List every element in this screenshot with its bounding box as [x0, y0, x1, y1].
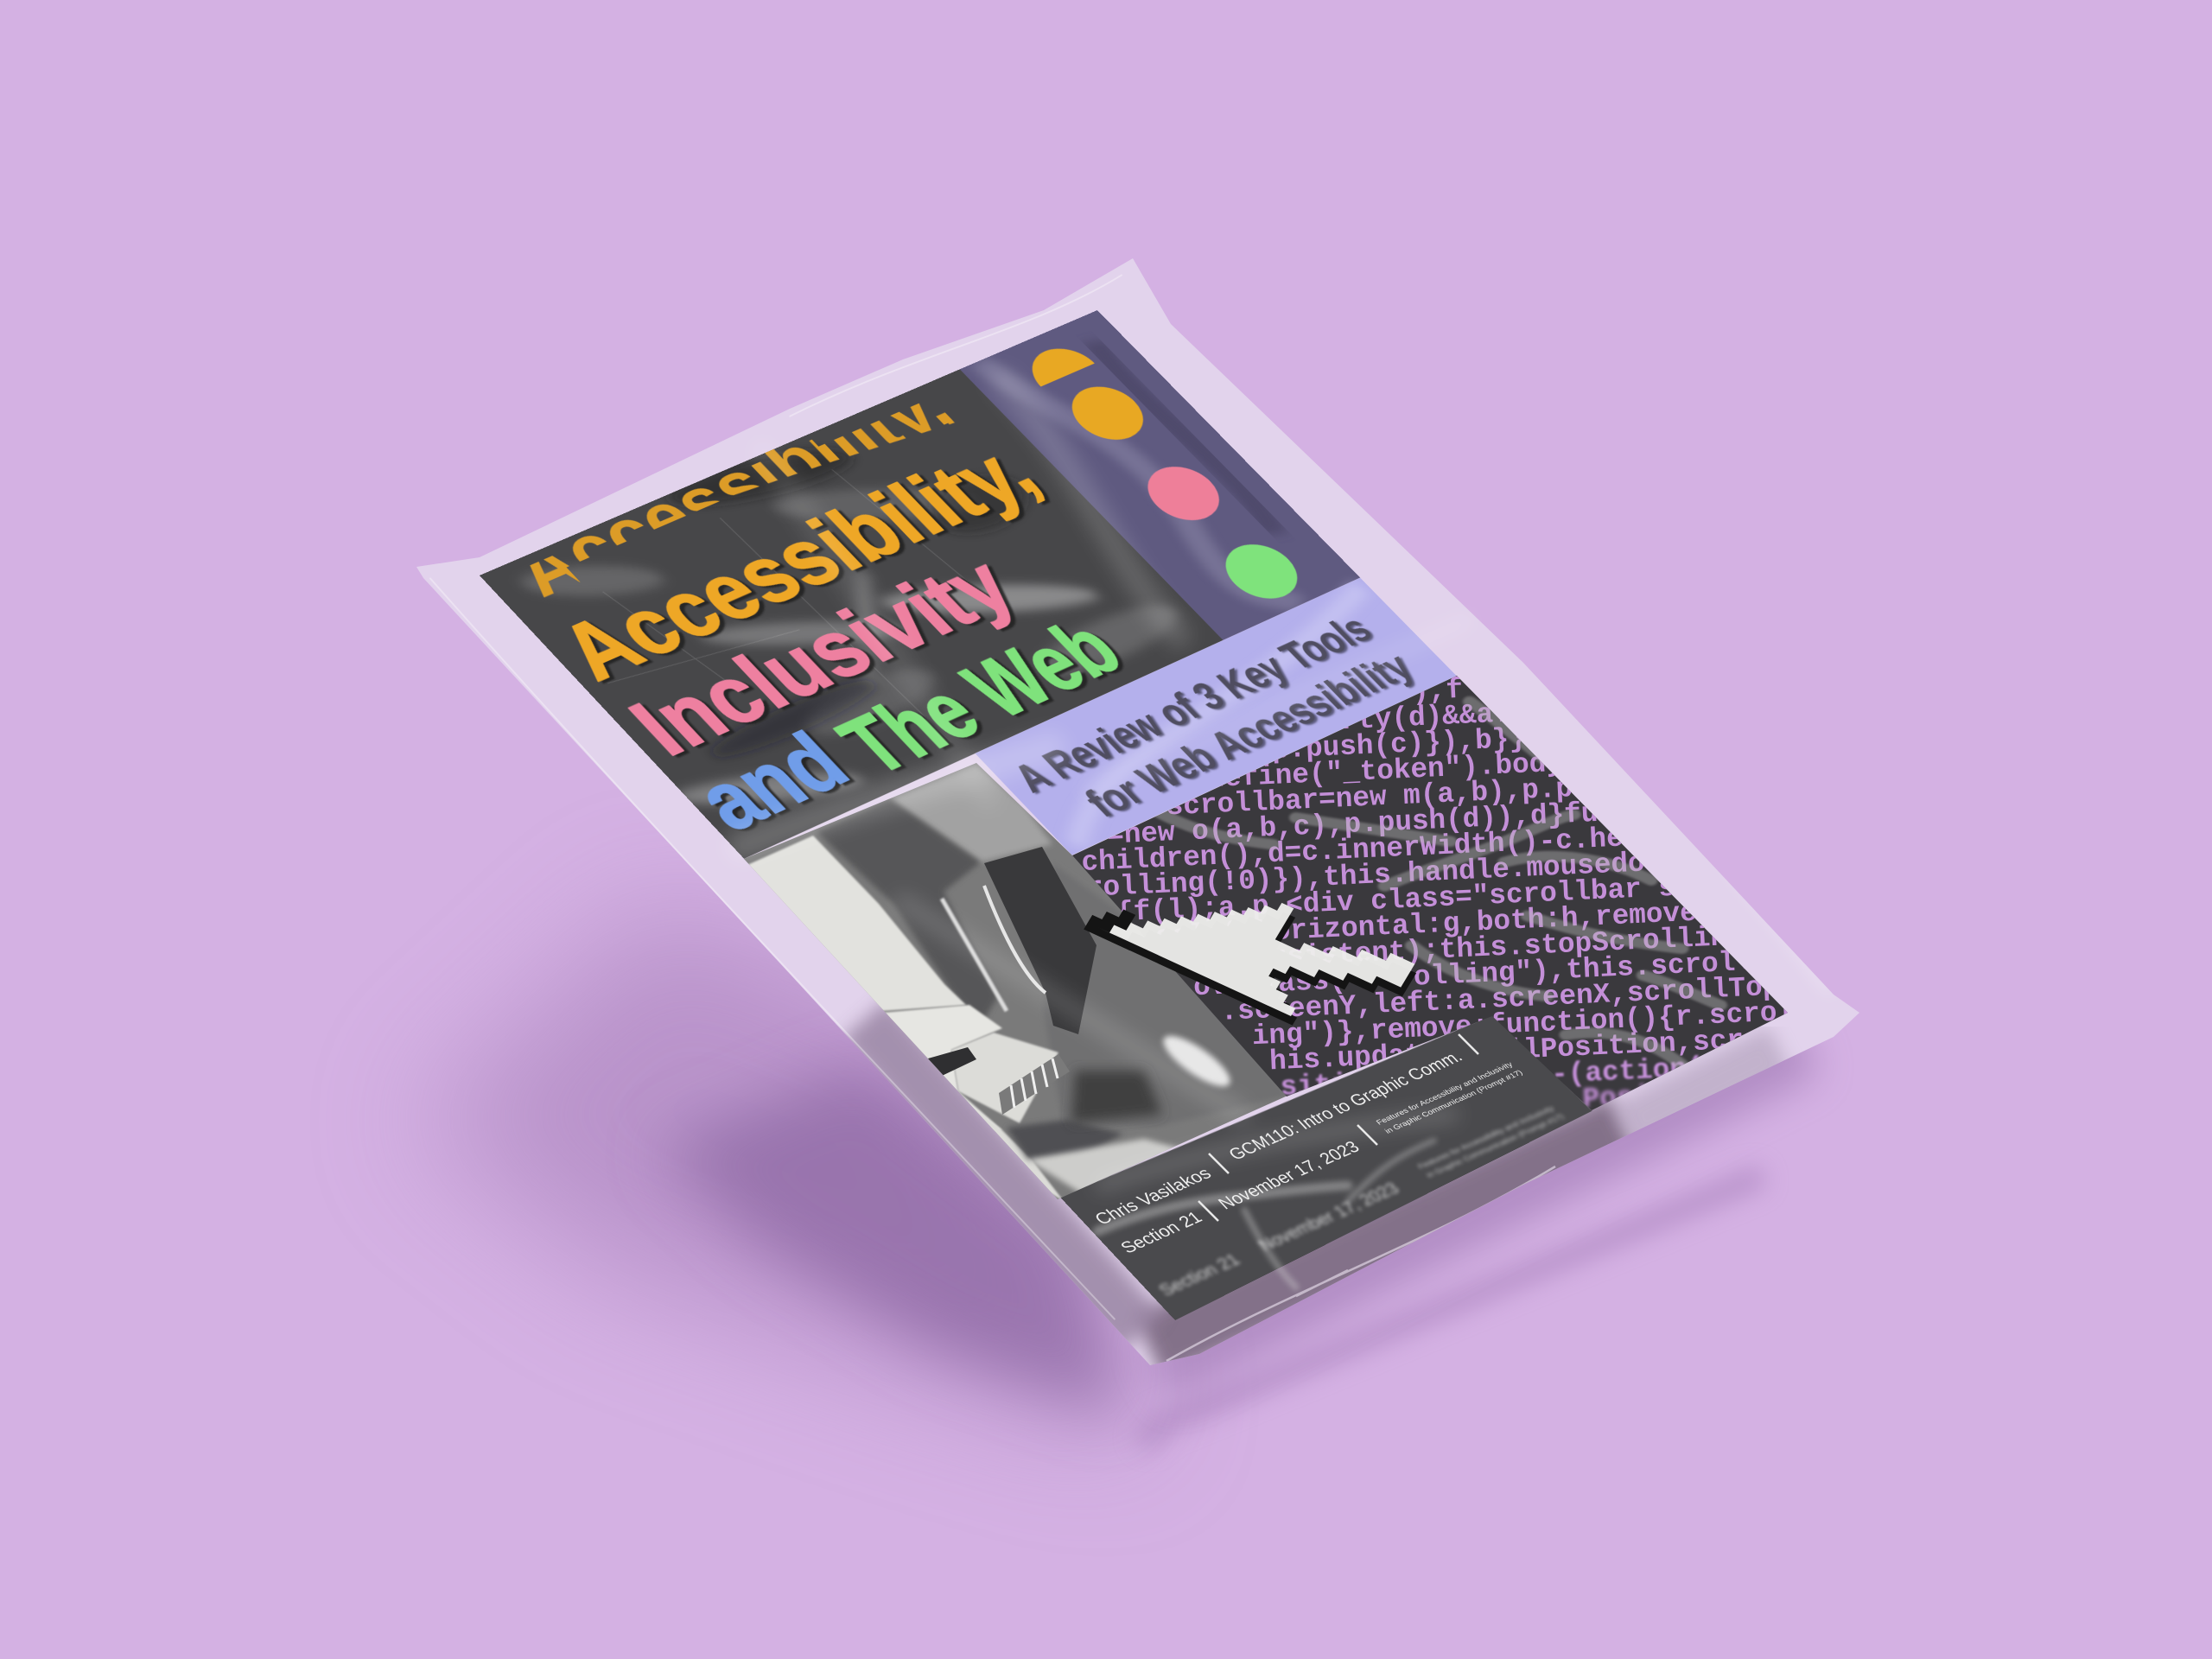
header panel: [457, 359, 1224, 864]
subtitle line 1: A Review of 3 Key Tools: [1004, 621, 1412, 799]
code listing: Position: [1582, 1077, 1719, 1116]
keyboard: [999, 1054, 1070, 1115]
author: Chris Vasilakos: [1090, 1164, 1216, 1229]
code listing: is.persistent);this.stopScrolling: [1185, 920, 1745, 978]
footer credits: [1090, 1034, 1524, 1257]
blurred reflection of footer text: in Graphic Communication (Prompt #17): [1425, 1113, 1566, 1179]
prompt note line 2: in Graphic Communication (Prompt #17): [1383, 1069, 1524, 1135]
plastic glare and creases: [430, 275, 1467, 1319]
monitor: [984, 847, 1096, 1034]
code listing: scrollbar=new m(a,b),p.push(d): [1166, 768, 1675, 823]
code listing: perty(d)&&a.push(c): [1306, 692, 1630, 739]
code panel: [1072, 676, 1788, 1110]
prompt note line 1: Features for Accessibility and Inclusivity: [1375, 1060, 1515, 1126]
darker lower margins of the bag: [840, 999, 1790, 1365]
code listing: sition:this.bar,-(action()){return: [1280, 1046, 1857, 1103]
blurred reflection of footer text: [1154, 1104, 1566, 1300]
plastic swirls over the footer: [1097, 1141, 1434, 1287]
ground shadow and plastic bag body: [416, 258, 1859, 1462]
code listing: cal:f,horizontal:g,both:h,remove: [1154, 897, 1698, 953]
title: The Web: The Web: [818, 613, 1154, 786]
code listing: .screenY,left:a.screenX,scrollTop: [1220, 971, 1780, 1028]
title: Inclusivity: Inclusivity: [607, 550, 1049, 765]
photo, code, cursor, footer text and plastic glare: [429, 275, 1788, 1320]
code listing: oveClass("scrolling"),this.scrollTo: [1192, 944, 1787, 1003]
blurred reflection of footer text: November 17, 2023: [1254, 1179, 1403, 1255]
blurred reflection of footer text: Features for Accessibility and Inclusivity: [1416, 1104, 1556, 1170]
title: and: and: [667, 715, 862, 836]
half circle: [1018, 340, 1095, 386]
wavy plastic reflections over the code: [1141, 702, 1720, 1065]
subtitle line 2: for Web Accessibility: [1076, 658, 1452, 824]
photo panel: workstation in greyscale: [744, 763, 1287, 1199]
code listing: children(),d=c.innerWidth()-c.height: [1081, 819, 1692, 879]
reflected title fragment: Accessibility,: [495, 380, 996, 611]
poster printed inside the bag: [480, 310, 1592, 1320]
code listing: his.updateScrollPosition,scrollTop: [1268, 1020, 1846, 1077]
icon: pixel arrow cursor: [1084, 837, 1421, 1058]
footer panel: [1060, 993, 1592, 1320]
green dot: [1211, 535, 1312, 607]
course: GCM110: Intro to Graphic Comm.: [1224, 1047, 1466, 1164]
code listing: define("_token").body: [1207, 747, 1564, 795]
pink dot: [1133, 458, 1234, 530]
code listing: p.push(c)}),b}}: [1271, 723, 1527, 766]
orange dot: [1058, 378, 1158, 448]
blurred reflection of footer text: Section 21: [1154, 1250, 1244, 1300]
code listing: =new o(a,b,c),p.push(d)),d}function: [1106, 793, 1700, 852]
code listing: {f(l);a.p <div class="scrollbar scroll: [1116, 868, 1761, 929]
code listing: rolling(!0)}),this.handle.mousedown: [1085, 846, 1680, 905]
subtitle band: [976, 578, 1457, 855]
purple dots panel: [960, 310, 1360, 640]
code listing: ing")},remove:function(){r.scrolling: [1251, 993, 1862, 1052]
section: Section 21: [1116, 1208, 1206, 1257]
title: Accessibility: Accessibility,: [538, 440, 1082, 693]
code listing: [1074, 657, 1866, 1138]
date: November 17, 2023: [1214, 1138, 1363, 1213]
code listing: ="),f: [1377, 674, 1464, 709]
